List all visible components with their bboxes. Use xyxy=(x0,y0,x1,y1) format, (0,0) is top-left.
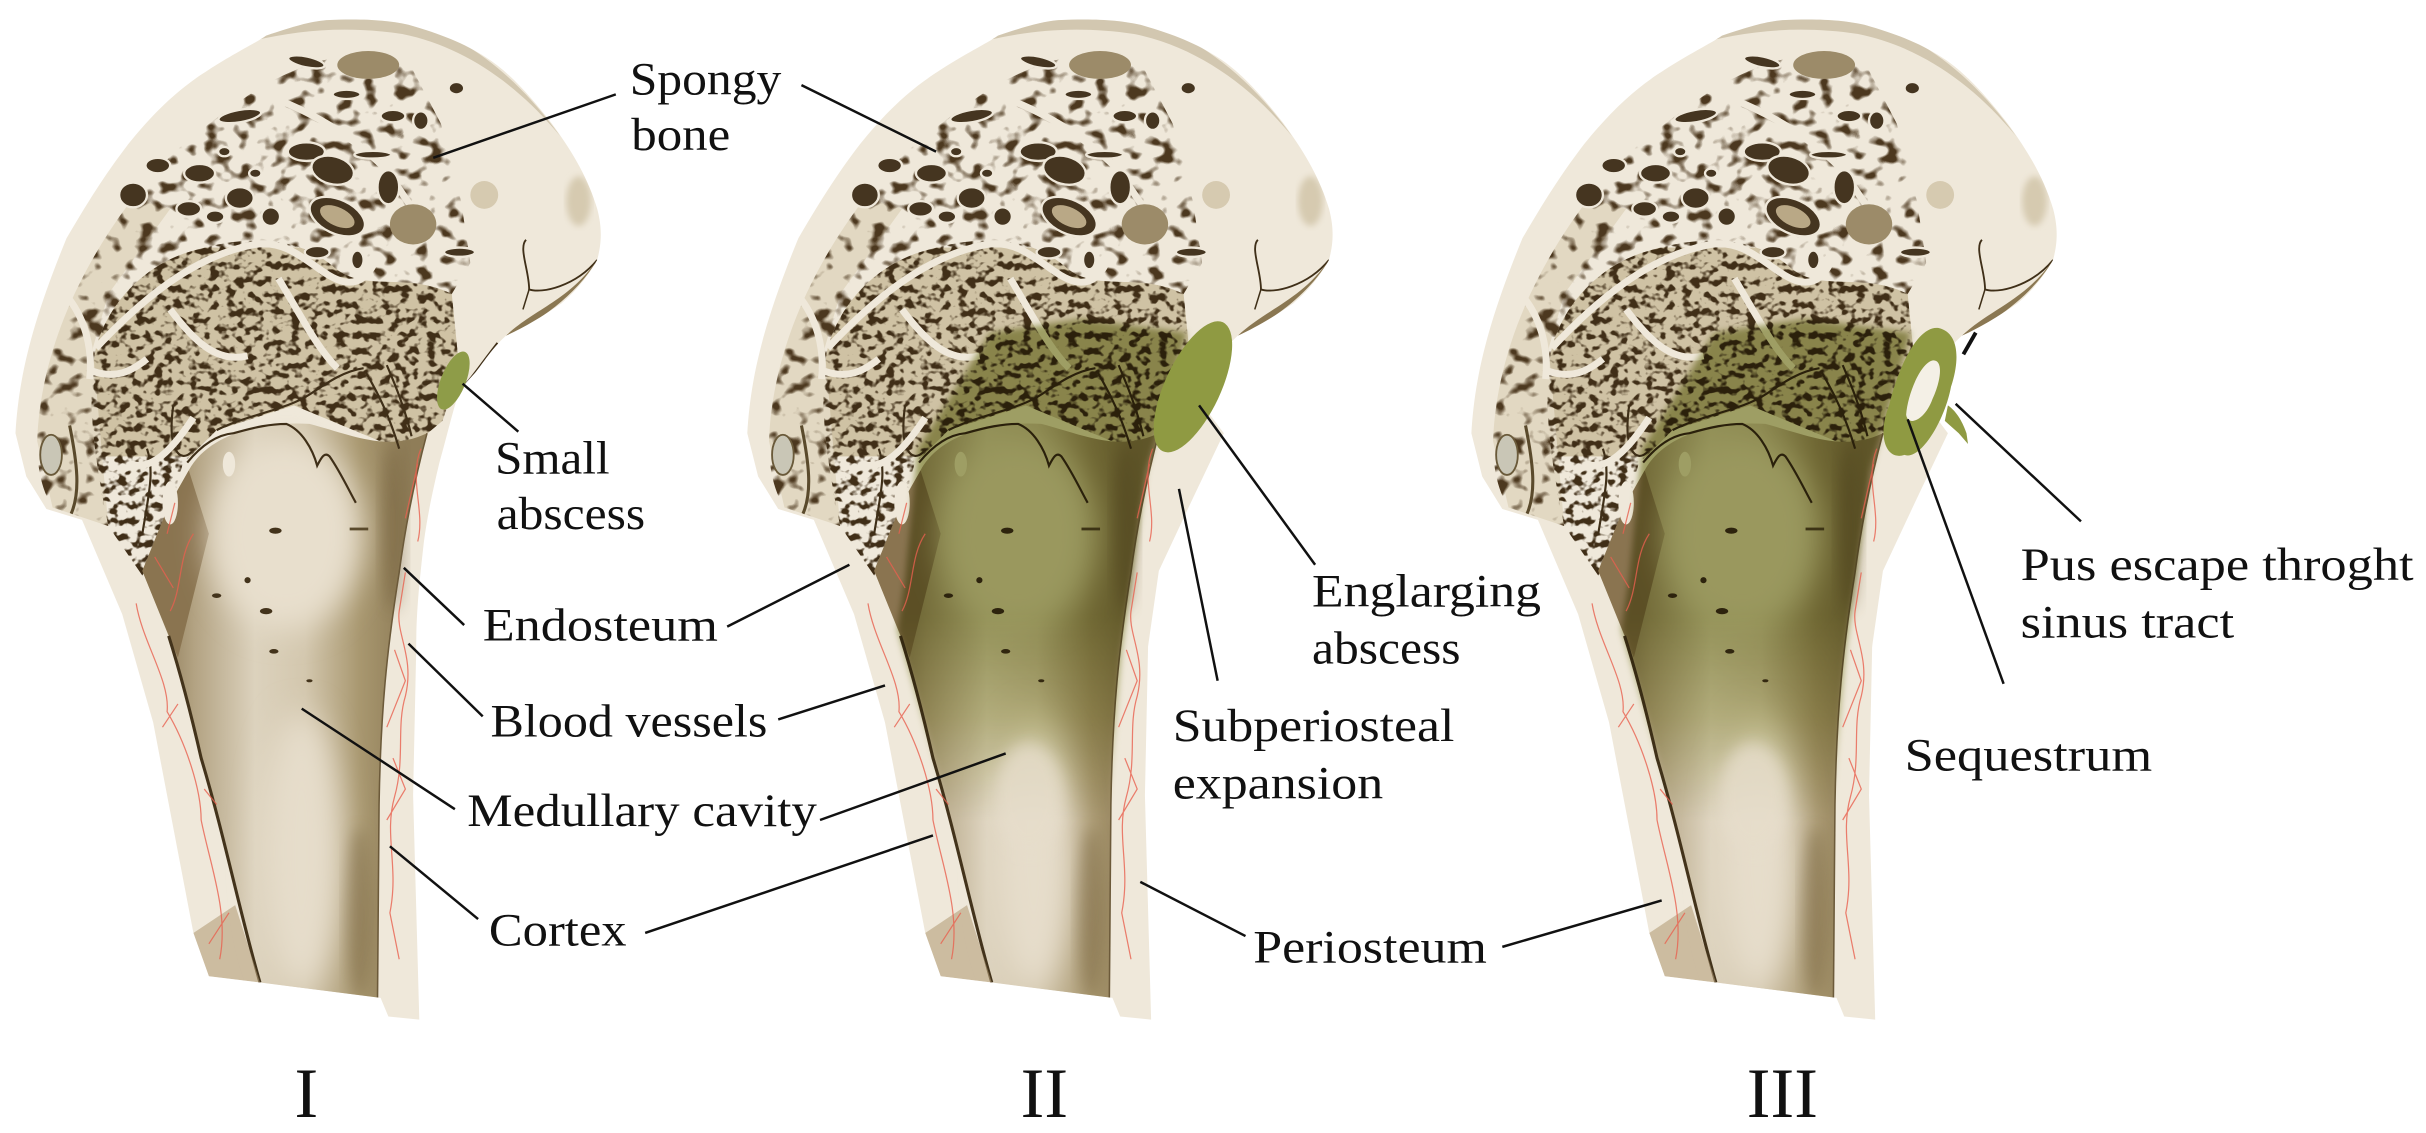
label: Pus escape throught sinus tract: sinus tract xyxy=(2021,597,2234,648)
stage label III: III xyxy=(1747,1055,1818,1133)
label: Spongy bone: bone xyxy=(631,110,730,161)
label: Blood vessels: Blood vessels xyxy=(490,696,767,747)
label: Periosteum: Periosteum xyxy=(1253,922,1487,973)
stage label II: II xyxy=(1021,1055,1068,1133)
label: Englarging abscess: abscess xyxy=(1312,624,1461,675)
label: Small abscess: Small xyxy=(495,433,610,484)
label: Englarging abscess: Englarging xyxy=(1312,566,1541,617)
panel: stage III bone xyxy=(1456,0,2075,1020)
icon: abscess ring with sequestrum xyxy=(1883,328,1976,456)
label: Pus escape throught sinus tract: Pus escape throght xyxy=(2021,540,2414,591)
panel: stage II bone xyxy=(732,0,1351,1020)
label: Sequestrum: Sequestrum xyxy=(1905,730,2152,781)
label: Small abscess: abscess xyxy=(497,489,645,540)
panel: stage I bone xyxy=(0,0,619,1020)
label: Cortex: Cortex xyxy=(489,905,627,956)
leader lines xyxy=(302,85,2081,947)
stage label I: I xyxy=(295,1055,318,1133)
icon: enlarging abscess xyxy=(1138,311,1248,463)
icon: small abscess xyxy=(430,347,476,414)
label: Spongy bone: Spongy xyxy=(630,54,782,105)
label: Medullary cavity: Medullary cavity xyxy=(467,786,818,837)
label: Subperiosteal expansion: expansion xyxy=(1173,758,1383,809)
label: Endosteum: Endosteum xyxy=(483,601,718,652)
label: Subperiosteal expansion: Subperiosteal xyxy=(1173,701,1454,752)
